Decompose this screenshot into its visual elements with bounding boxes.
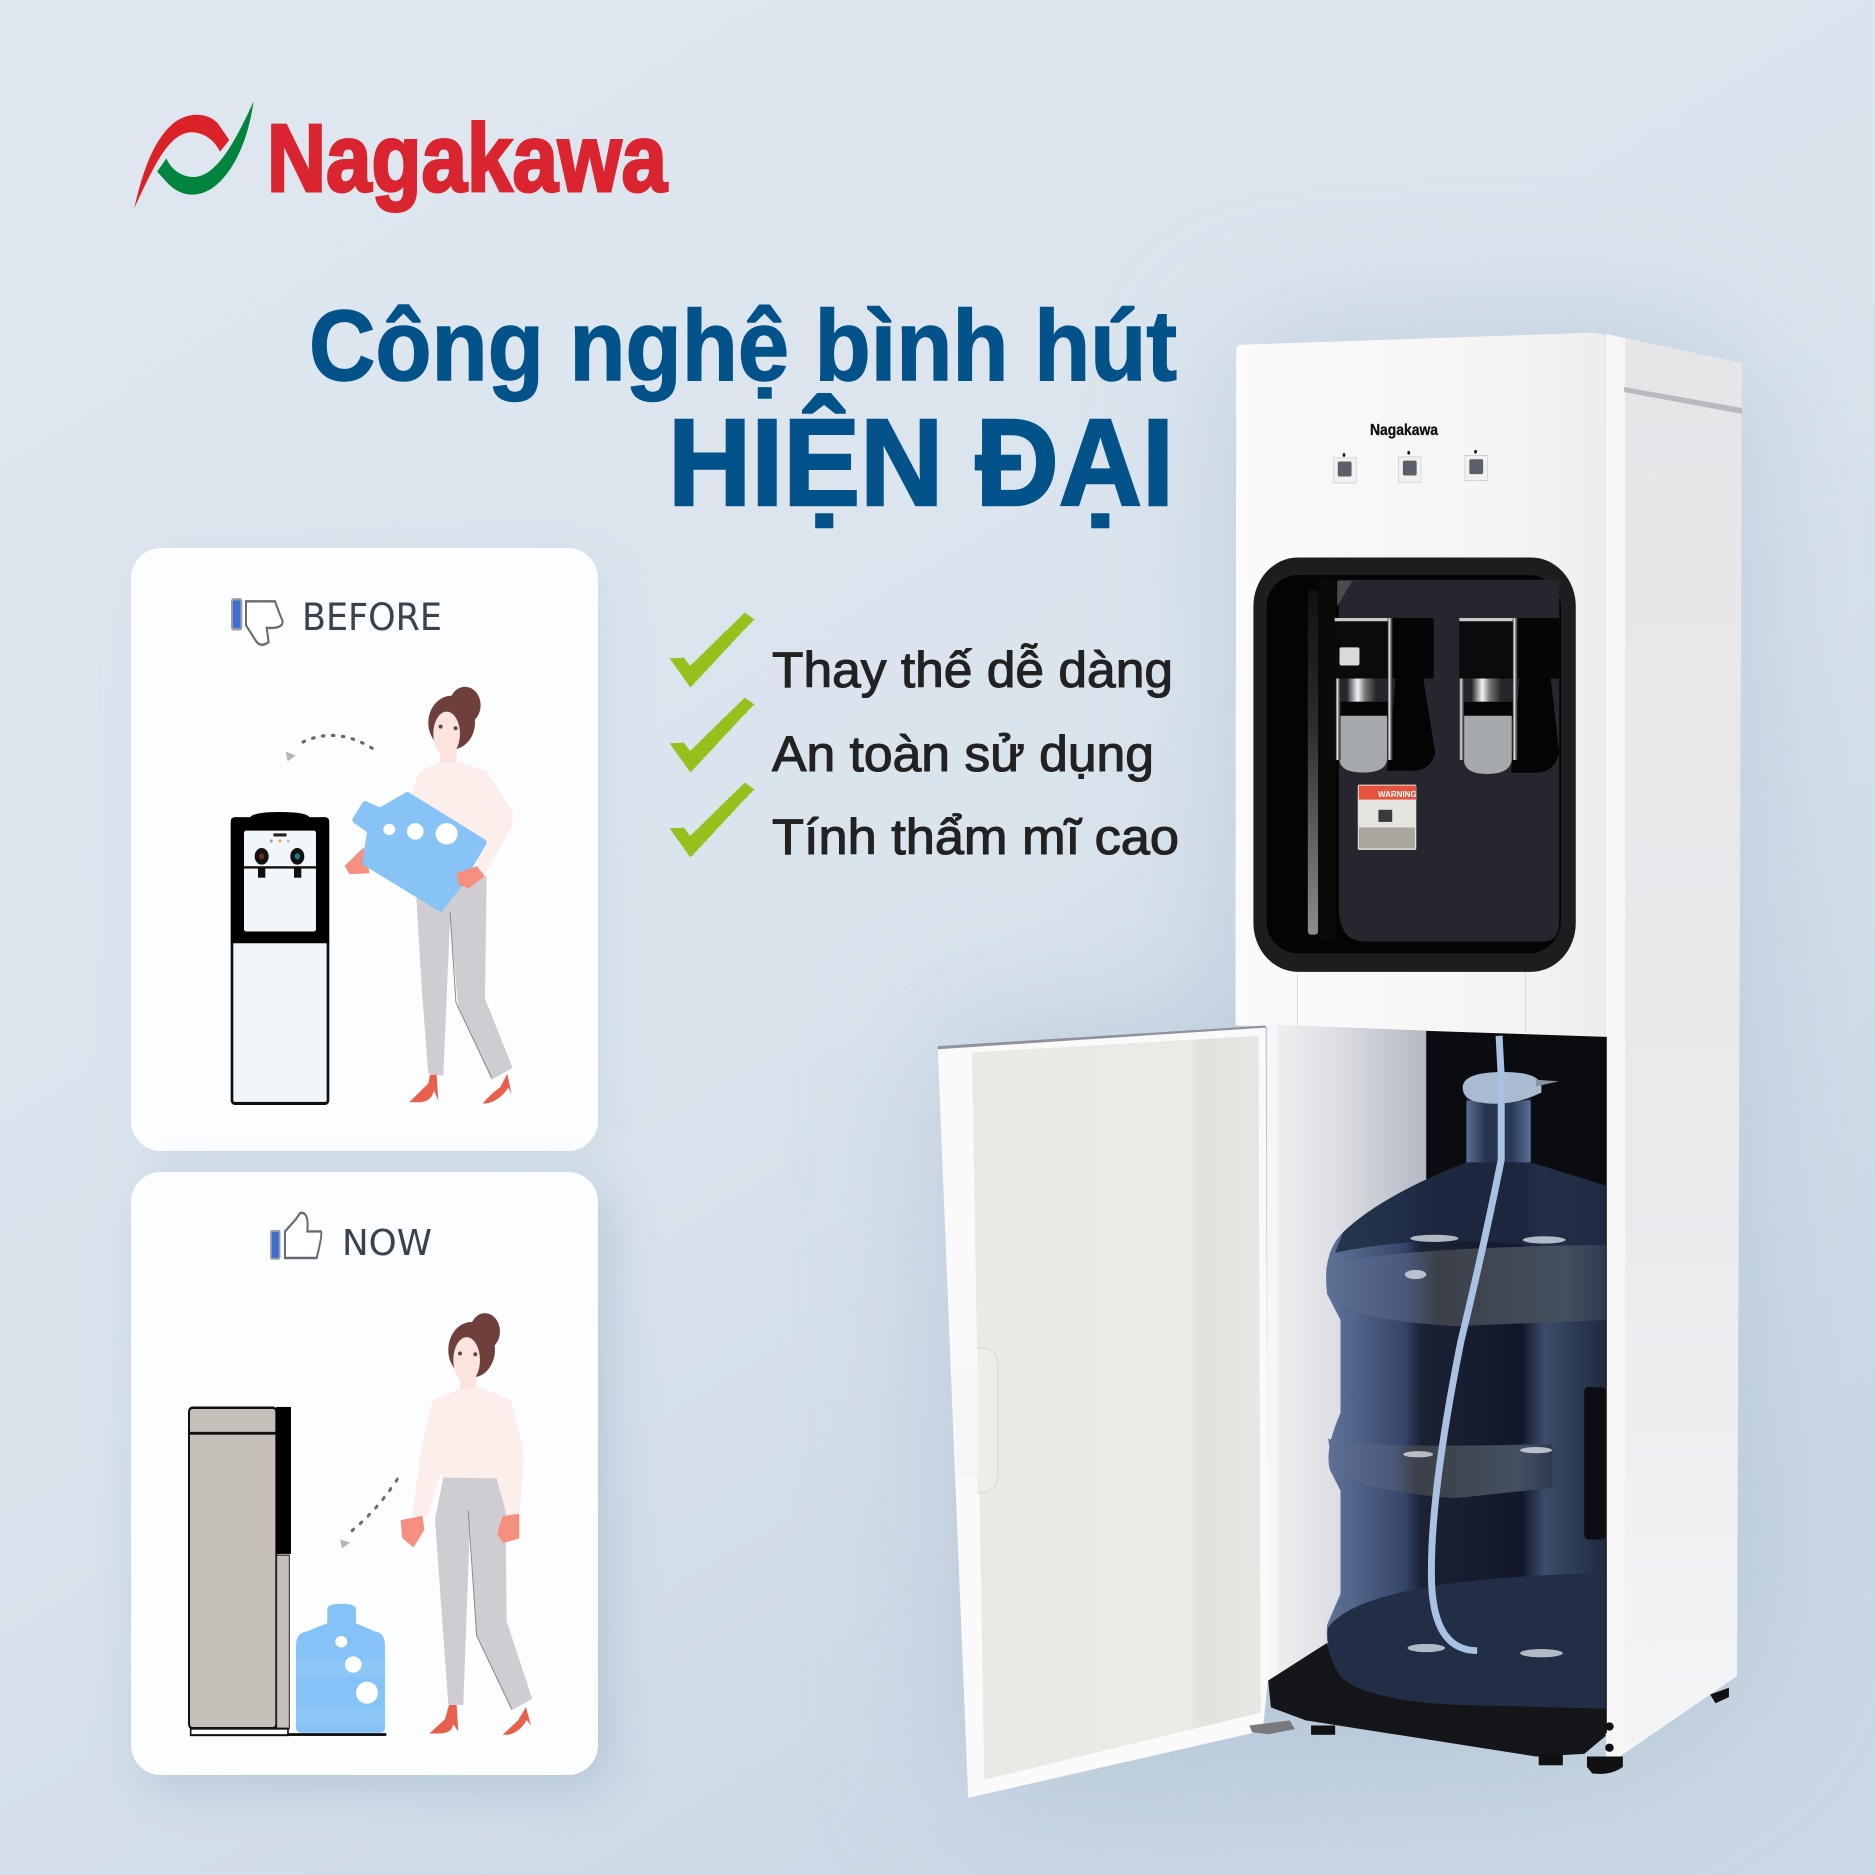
- right tap: [1459, 618, 1559, 774]
- warning sticker text: WARNING: [1378, 790, 1417, 799]
- benefit 3: Tính thẩm mĩ cao: [772, 809, 1179, 865]
- suction tube: [1431, 1036, 1501, 1651]
- panel: now: [131, 1172, 610, 1789]
- benefits list: [670, 613, 1179, 865]
- casters: [1311, 1725, 1563, 1765]
- icon: check 3: [670, 783, 754, 858]
- heading line 1: Công nghệ bình hút: [309, 290, 1177, 402]
- lower compartment: [938, 1024, 1729, 1798]
- now label text: NOW: [342, 1223, 432, 1264]
- logo mark: green swoosh: [157, 102, 254, 195]
- before label text: BEFORE: [302, 596, 442, 639]
- interior side wall: [1268, 1024, 1426, 1692]
- dispensing recess: [1253, 557, 1576, 972]
- warning sticker: [1358, 785, 1416, 850]
- woman carrying bottle: [346, 687, 513, 1103]
- bottle carried: [355, 795, 484, 909]
- base tray: [1268, 1643, 1606, 1756]
- dispenser side wall: [1606, 334, 1742, 1766]
- old water dispenser: [231, 812, 329, 1103]
- panel: before: [131, 548, 608, 1163]
- dispenser head front: [1235, 333, 1606, 1039]
- logo mark: red swoosh: [134, 115, 229, 208]
- open door: [938, 1025, 1268, 1798]
- benefit 2: An toàn sử dụng: [772, 726, 1154, 782]
- screws: [1605, 1722, 1614, 1752]
- logo: [134, 102, 668, 212]
- icon: check 2: [670, 698, 754, 773]
- icon: check 1: [670, 613, 754, 688]
- interior back: [1268, 1025, 1607, 1733]
- heading line 2: HIỆN ĐẠI: [668, 395, 1174, 532]
- arrow: dotted: [286, 735, 372, 761]
- left tap: [1335, 618, 1435, 773]
- woman standing: [402, 1313, 532, 1735]
- control buttons: [1334, 450, 1488, 483]
- logo wordmark: Nagakawa: [267, 105, 668, 212]
- benefit 1: Thay thế dễ dàng: [772, 642, 1173, 698]
- water bottle: [1326, 1036, 1606, 1708]
- icon: thumbs up: [271, 1213, 321, 1259]
- new dispenser: [189, 1407, 386, 1736]
- panel brand text: Nagakawa: [1370, 422, 1438, 439]
- icon: thumbs down: [232, 599, 283, 645]
- hinge: [1249, 1720, 1295, 1734]
- bottle highlights: [1403, 1235, 1566, 1657]
- water dispenser product: [938, 333, 1742, 1798]
- bottle on floor: [296, 1604, 385, 1733]
- foot right: [1710, 1688, 1729, 1703]
- arrow: dotted: [340, 1479, 397, 1548]
- foot left: [1587, 1756, 1623, 1774]
